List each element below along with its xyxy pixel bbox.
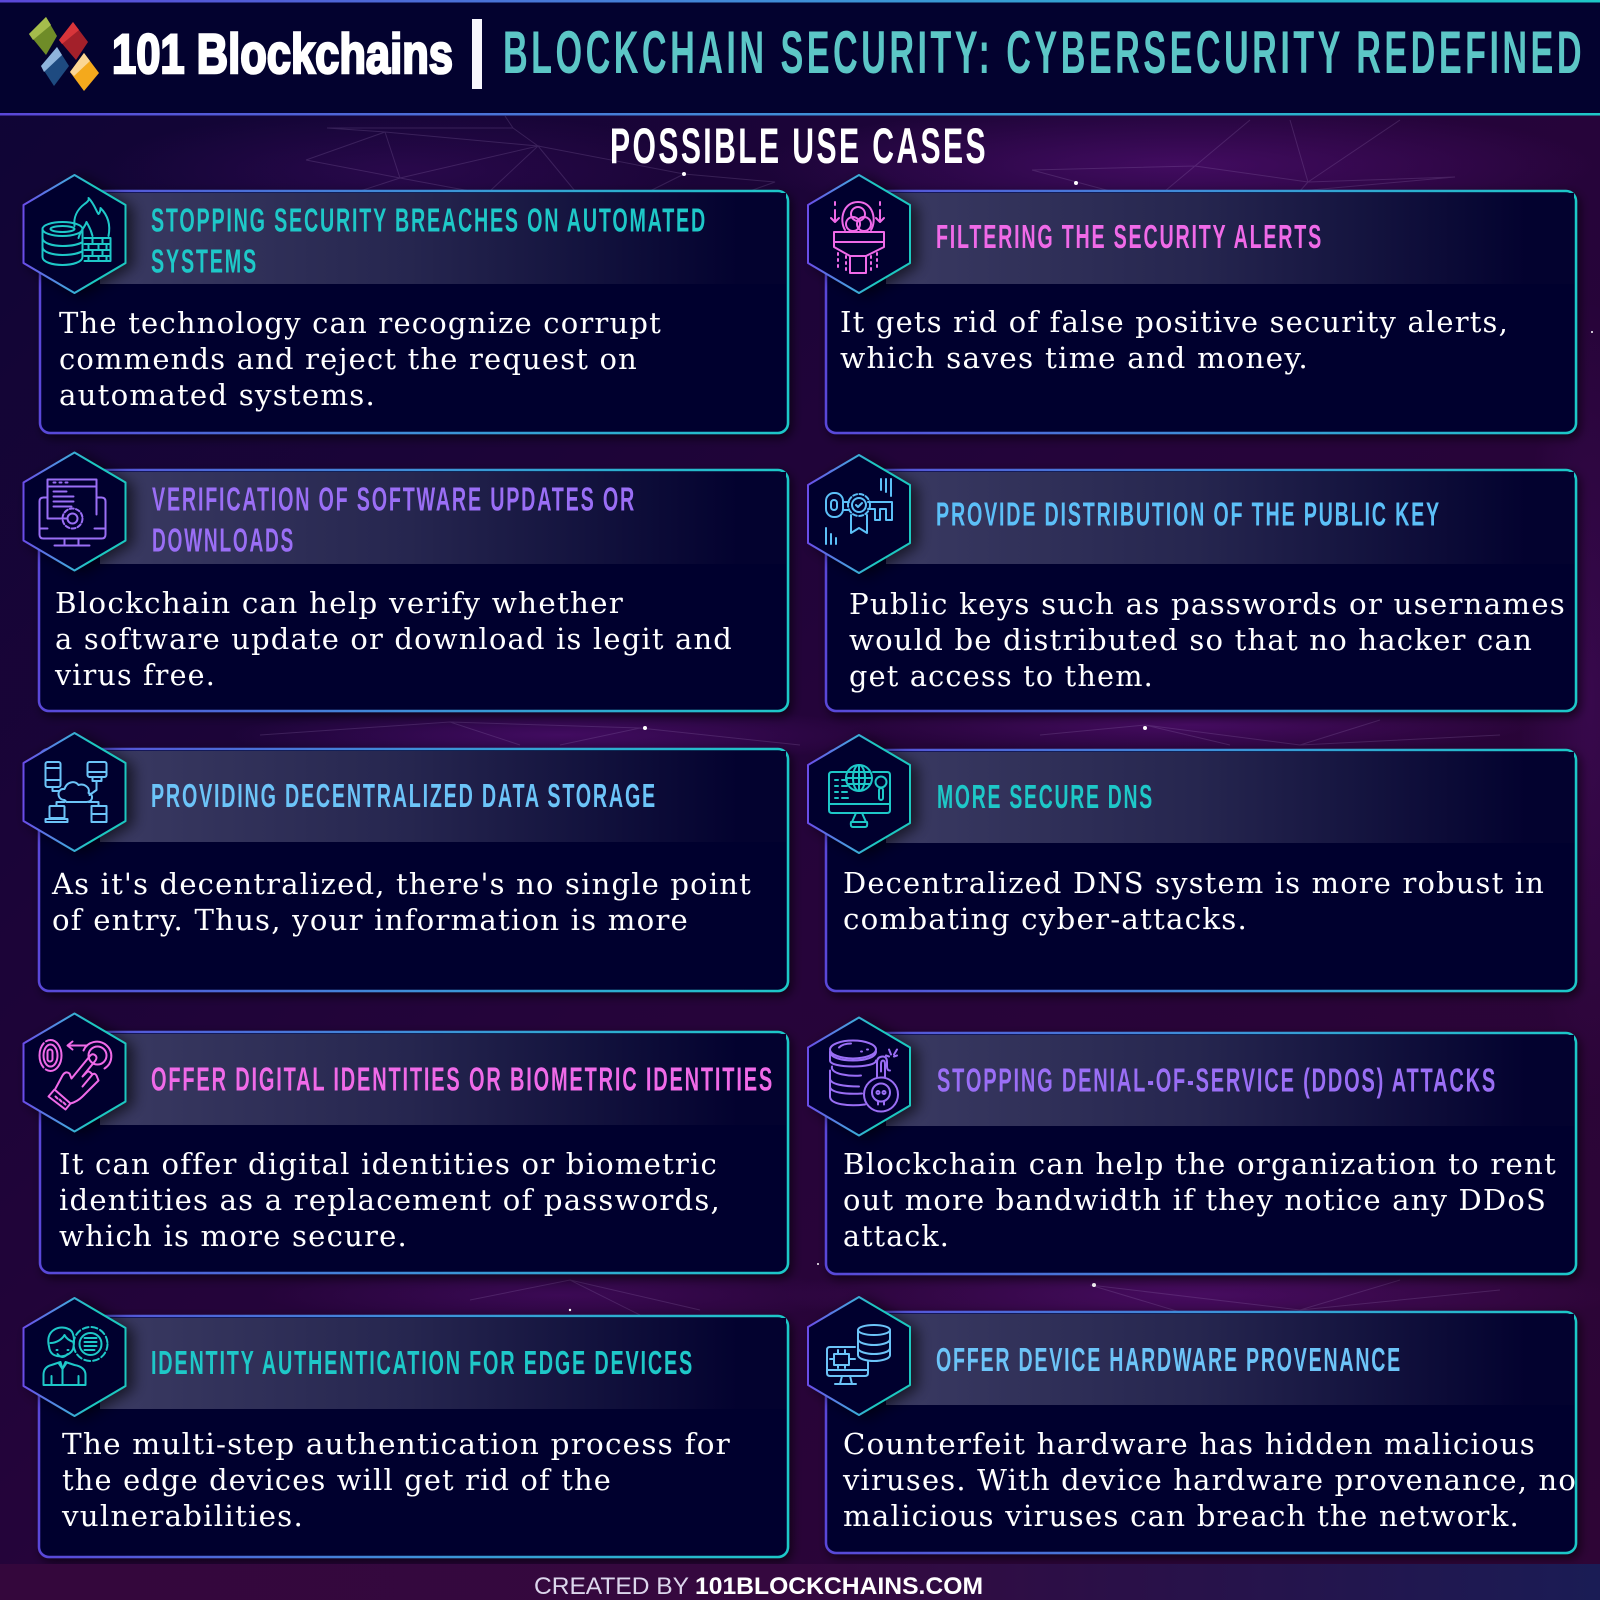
icon badge [808, 1018, 910, 1136]
body text: The technology can recognize corrupt [59, 306, 662, 340]
card frame [826, 1312, 1576, 1553]
body text: malicious viruses can breach the network. [843, 1499, 1520, 1533]
panel: stopping security breaches [24, 175, 788, 433]
icon badge [808, 455, 910, 573]
heading: MORE SECURE DNS [937, 778, 1154, 815]
credit line: CREATED BY [534, 1573, 689, 1600]
body text [843, 1147, 1557, 1253]
heading: OFFER DIGITAL IDENTITIES OR BIOMETRIC IDENTITIES [151, 1060, 774, 1098]
panel: verification of software updates [24, 452, 788, 711]
logo: 101 Blockchains cubes [29, 17, 99, 91]
subtitle: POSSIBLE USE CASES [610, 118, 988, 174]
header band [100, 1034, 786, 1125]
heading [151, 202, 707, 280]
icon: database firewall [42, 198, 110, 265]
header band [886, 472, 1574, 564]
icon badge [24, 452, 126, 570]
card frame [40, 1032, 788, 1273]
body text [59, 306, 662, 412]
body text: vulnerabilities. [61, 1499, 304, 1533]
body text: combating cyber-attacks. [843, 902, 1248, 936]
body text: Counterfeit hardware has hidden malicious [843, 1427, 1536, 1461]
icon: cloud network [46, 762, 106, 822]
body text [61, 1427, 731, 1533]
body text: would be distributed so that no hacker can [849, 623, 1533, 657]
icon badge [24, 1014, 126, 1132]
icon badge [24, 175, 126, 293]
header bar [0, 0, 1600, 116]
body text: As it's decentralized, there's no single point [51, 867, 752, 901]
heading: FILTERING THE SECURITY ALERTS [936, 218, 1323, 255]
body text: which saves time and money. [840, 341, 1309, 375]
panel: filtering the security alerts [808, 175, 1576, 433]
icon: fingerprint and hand [40, 1040, 111, 1110]
body text: commends and reject the request on [59, 342, 638, 376]
heading: DOWNLOADS [152, 522, 295, 558]
body text: Blockchain can help verify whether [55, 586, 624, 620]
card frame [826, 750, 1576, 991]
panel: more secure DNS [808, 735, 1576, 991]
panel: offer device hardware provenance [808, 1297, 1577, 1553]
icon badge [24, 733, 126, 851]
panel: offer digital identities [24, 1014, 788, 1273]
heading: IDENTITY AUTHENTICATION FOR EDGE DEVICES [151, 1344, 694, 1381]
card frame [39, 470, 788, 711]
body text [59, 1147, 721, 1253]
heading [152, 480, 636, 558]
body text: attack. [843, 1219, 950, 1253]
divider [472, 19, 482, 89]
header band [100, 1318, 786, 1409]
body text: out more bandwidth if they notice any DDoS [843, 1183, 1547, 1217]
icon: monitor and database [827, 1325, 890, 1384]
body text: viruses. With device hardware provenance, no [842, 1463, 1577, 1497]
panel: stopping denial-of-service attacks [808, 1018, 1576, 1274]
body text: Decentralized DNS system is more robust in [843, 866, 1545, 900]
body text: identities as a replacement of passwords, [59, 1183, 721, 1217]
body text: It can offer digital identities or biometric [59, 1147, 718, 1181]
header band [100, 193, 786, 284]
card frame [826, 1033, 1576, 1274]
body text: Public keys such as passwords or usernames [849, 587, 1566, 621]
body text: Blockchain can help the organization to rent [843, 1147, 1557, 1181]
card frame [39, 1316, 788, 1557]
body text: of entry. Thus, your information is more [52, 903, 689, 937]
heading: SYSTEMS [151, 242, 258, 280]
body text [842, 1427, 1577, 1533]
credit line: 101BLOCKCHAINS.COM [695, 1573, 983, 1600]
body text: automated systems. [59, 378, 376, 412]
body text: virus free. [54, 658, 216, 692]
body text [840, 305, 1509, 375]
body text [849, 587, 1566, 693]
header band [886, 193, 1574, 284]
card frame [826, 191, 1576, 433]
icon: key with badge [826, 479, 892, 544]
icon: filter funnel [831, 202, 884, 273]
body text: which is more secure. [59, 1219, 408, 1253]
footer [0, 1564, 1600, 1600]
icon: coin stack and bomb [830, 1040, 898, 1112]
icon badge [808, 735, 910, 853]
header band [886, 1314, 1574, 1405]
logo wordmark: 101 Blockchains [112, 22, 453, 85]
panel: identity authentication [24, 1298, 788, 1557]
card frame [39, 749, 788, 991]
body text: It gets rid of false positive security alerts, [840, 305, 1509, 339]
card frame [826, 470, 1576, 711]
heading: STOPPING SECURITY BREACHES ON AUTOMATED [151, 202, 707, 238]
icon badge [808, 1297, 910, 1415]
body text: The multi-step authentication process for [62, 1427, 731, 1461]
panel: providing decentralized data storage [24, 733, 788, 991]
heading: VERIFICATION OF SOFTWARE UPDATES OR [152, 480, 636, 518]
panel: provide distribution of the public key [808, 455, 1576, 711]
body text [51, 867, 752, 937]
header band [100, 751, 786, 842]
icon: monitor with gear [40, 480, 106, 546]
header band [886, 1035, 1574, 1126]
card frame [40, 191, 788, 433]
header band [886, 752, 1574, 843]
icon badge [808, 175, 910, 293]
header band [100, 472, 786, 564]
icon: person with gear [44, 1327, 108, 1385]
icon badge [24, 1298, 126, 1416]
body text [843, 866, 1545, 936]
body text: the edge devices will get rid of the [62, 1463, 612, 1497]
body text: a software update or download is legit and [55, 622, 733, 656]
body text: get access to them. [849, 659, 1154, 693]
icon: monitor with globe [829, 765, 890, 827]
body text [54, 586, 733, 692]
heading: PROVIDING DECENTRALIZED DATA STORAGE [151, 777, 657, 814]
